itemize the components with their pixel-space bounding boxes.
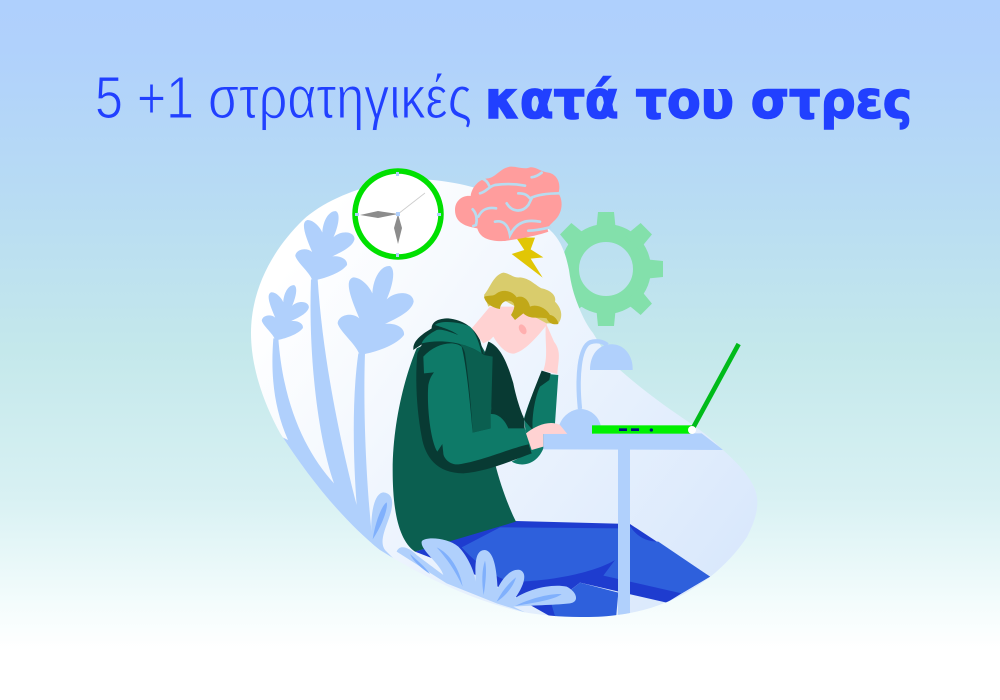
person: upper sleeve mid tone xyxy=(459,344,493,432)
white organic blob backdrop xyxy=(251,179,757,617)
person: jeans xyxy=(415,521,710,622)
person: sleeve xyxy=(423,343,528,464)
person: raised hand xyxy=(543,323,559,374)
icon: lightning bolt xyxy=(512,237,543,278)
person at desk xyxy=(393,307,723,622)
lamp xyxy=(559,341,633,434)
person: hoodie body xyxy=(393,333,523,552)
desk xyxy=(543,433,723,618)
title: 5 +1 στρατηγικές xyxy=(95,65,472,131)
plants: tall background stems xyxy=(260,211,414,563)
plant: foreground leaves xyxy=(397,538,576,612)
person: hood xyxy=(413,318,484,355)
title: κατά του στρες xyxy=(485,71,912,131)
icon: clock xyxy=(355,171,441,257)
icon: brain xyxy=(455,167,562,241)
title xyxy=(95,65,912,131)
person: arm shadow xyxy=(416,340,532,473)
person: raised forearm xyxy=(512,373,558,464)
person: typing hand xyxy=(526,423,567,450)
person: head xyxy=(472,307,550,354)
person: hair xyxy=(484,273,561,324)
person: cheek xyxy=(518,324,526,334)
laptop xyxy=(592,344,739,434)
person: hoodie front shadow xyxy=(484,342,525,433)
icon: gear xyxy=(549,212,663,326)
person: sleeve cuff xyxy=(524,371,551,430)
